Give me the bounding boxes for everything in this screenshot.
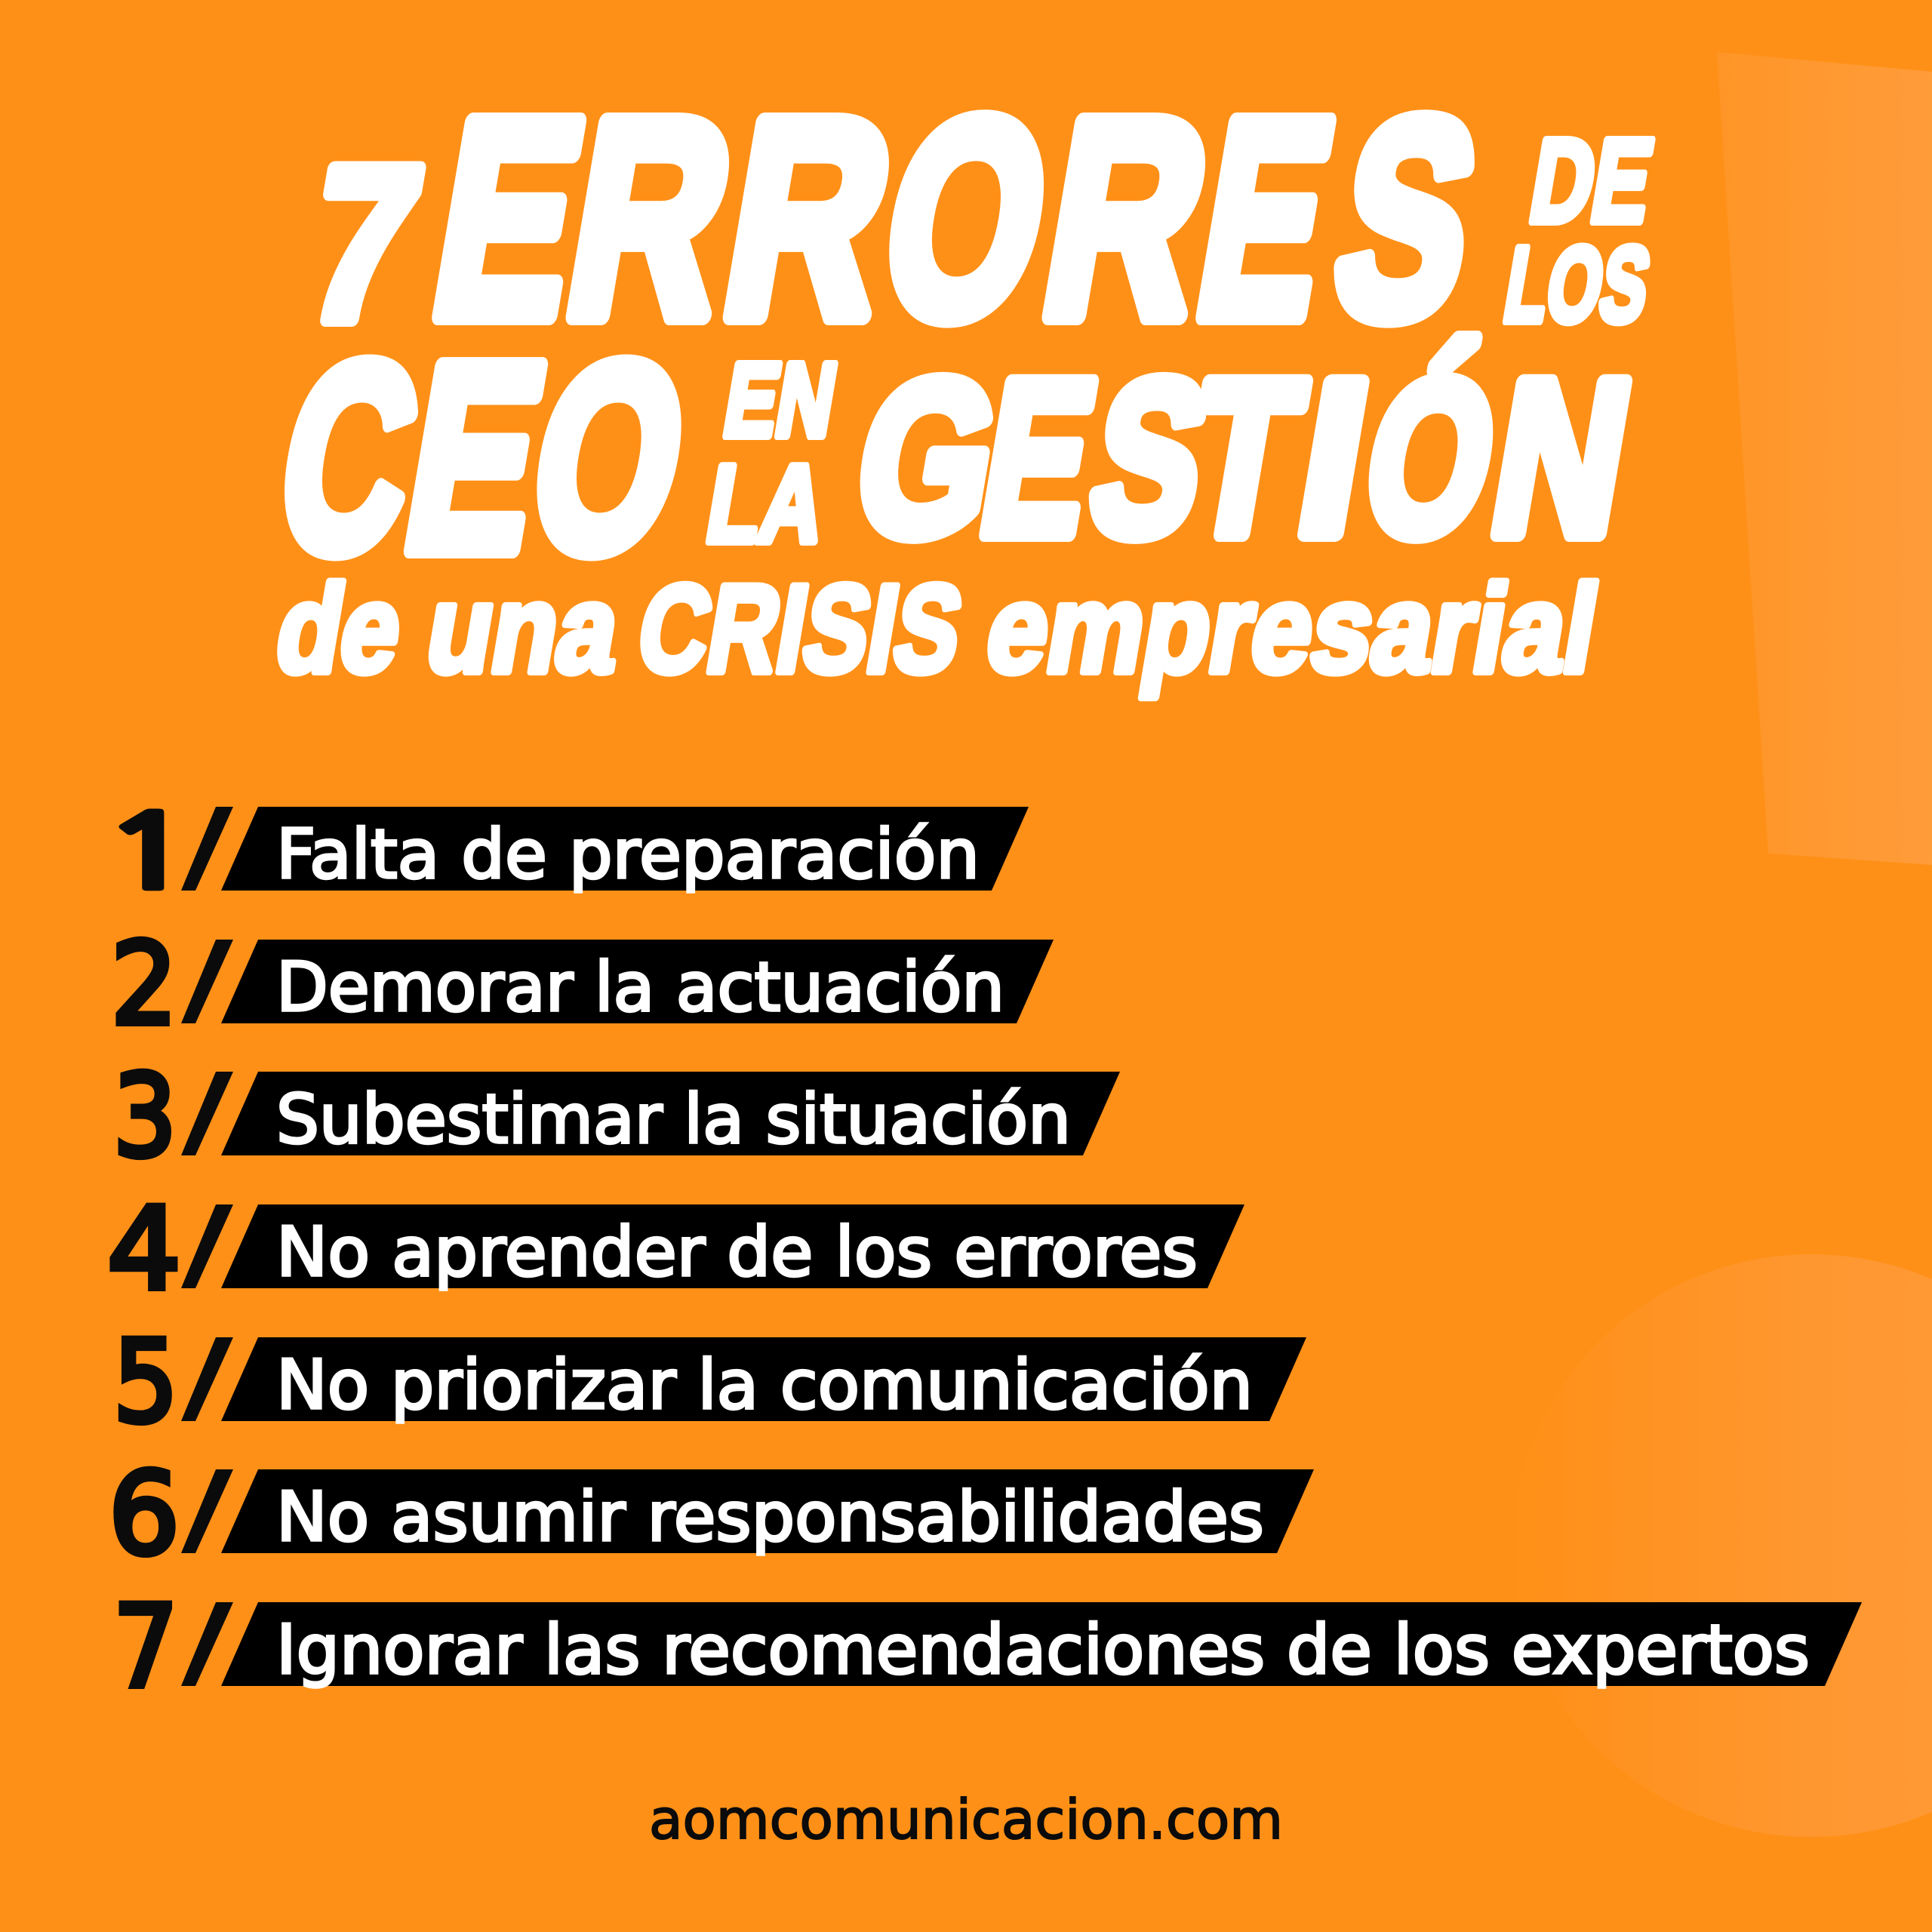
item 5 xyxy=(113,1317,1306,1448)
item 1: Falta de preparación xyxy=(276,815,980,894)
list of errors xyxy=(100,801,1862,1713)
title line 3: empresarial xyxy=(977,560,1607,699)
item 5: No priorizar la comunicación xyxy=(276,1346,1253,1425)
item 4: 4 xyxy=(107,1184,181,1315)
title line 1: DE xyxy=(1521,115,1662,247)
title line 2: N xyxy=(1477,336,1645,581)
item 6 xyxy=(109,1449,1314,1580)
title line 1: O xyxy=(865,62,1069,375)
item 3: Subestimar la situación xyxy=(276,1080,1071,1159)
title line 1: LOS xyxy=(1497,225,1658,344)
item 6: 6 xyxy=(109,1449,180,1580)
item 5: 5 xyxy=(113,1317,178,1448)
title line 3: de xyxy=(267,560,412,699)
title line 1: S xyxy=(1317,62,1497,375)
title line 1 xyxy=(293,62,1662,375)
background shape: top right xyxy=(1717,52,1932,865)
footer website: aomcomunicacion.com xyxy=(649,1788,1283,1851)
item 3 xyxy=(113,1051,1120,1183)
title line 1: R xyxy=(549,62,752,375)
background shape: bottom right xyxy=(1513,1254,1932,1837)
title line 2: LA xyxy=(699,442,834,565)
item 1: 1 xyxy=(100,801,198,905)
item 1 xyxy=(100,801,1029,905)
item 6: No asumir responsabilidades xyxy=(276,1478,1264,1557)
item 2 xyxy=(111,919,1054,1051)
item 4: No aprender de los errores xyxy=(276,1213,1198,1292)
title line 2: Ó xyxy=(1349,336,1512,581)
title line 2: S xyxy=(1075,336,1223,581)
title line 1: R xyxy=(1026,62,1228,375)
item 7: Ignorar las recomendaciones de los expertos xyxy=(276,1611,1810,1690)
item 3: 3 xyxy=(113,1051,177,1183)
title line 1: R xyxy=(706,62,912,375)
title line 2: EN xyxy=(716,342,844,458)
title line 1: E xyxy=(1180,62,1351,375)
title line 2: E xyxy=(388,309,562,606)
title line 3: CRISIS xyxy=(629,560,972,699)
item 2: Demorar la actuación xyxy=(276,948,1004,1027)
title line 2: I xyxy=(1283,336,1383,581)
title line 2: C xyxy=(261,309,436,606)
title xyxy=(261,62,1662,699)
item 4 xyxy=(107,1184,1244,1315)
item 7 xyxy=(113,1582,1862,1713)
title line 1: E xyxy=(416,62,601,375)
title line 2 xyxy=(261,309,1645,606)
item 7: 7 xyxy=(113,1582,178,1713)
title line 2: O xyxy=(513,309,705,606)
title line 3 xyxy=(267,560,1607,699)
title line 1: 7 xyxy=(293,122,435,366)
title line 2: T xyxy=(1173,336,1316,581)
title line 2: G xyxy=(841,336,1014,581)
title line 3: una xyxy=(417,560,630,699)
title line 2: E xyxy=(967,336,1110,581)
item 2: 2 xyxy=(111,919,177,1051)
